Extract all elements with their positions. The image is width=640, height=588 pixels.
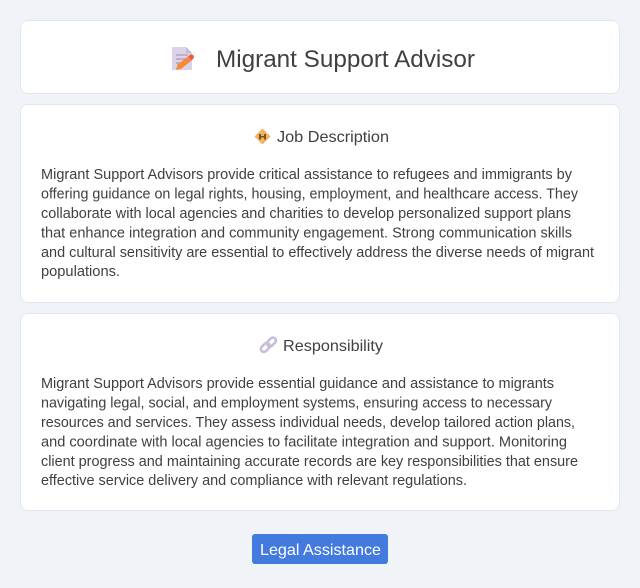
text block: job description <box>41 167 594 280</box>
text block: job description: Migrant Support Advisors provide critical assistance to refugees and immigrants by <box>41 167 573 183</box>
button: legal assistance <box>252 534 388 564</box>
panel: title card <box>20 20 620 94</box>
text block: job description: collaborate with local agencies and charities to develop personalized support plans <box>41 206 571 222</box>
panel: job description <box>20 104 620 303</box>
text block: responsibility: Migrant Support Advisors provide essential guidance and assistance to migrants <box>41 376 554 392</box>
icon: chain link <box>260 336 278 354</box>
panel: responsibility <box>20 313 620 511</box>
text block: responsibility: and coordinate with local agencies to facilitate integration and support. Monitoring <box>41 434 567 450</box>
title: Migrant Support Advisor <box>216 46 475 73</box>
button: legal assistance: Legal Assistance <box>260 542 381 559</box>
icon: diamond road sign <box>254 128 270 144</box>
text block: responsibility: resources and services. They assess individual needs, develop tailored action plans, <box>41 415 575 431</box>
text block: job description: populations. <box>41 264 120 280</box>
text block: responsibility: client progress and maintaining accurate records are key responsibilities that ensure <box>41 454 578 470</box>
text block: job description: and cultural sensitivity are essential to effectively address the diverse needs of migrant <box>41 245 594 261</box>
text block: responsibility: effective service delivery and compliance with relevant regulations. <box>41 473 467 489</box>
heading: job description: Job Description <box>277 129 389 146</box>
heading: responsibility: Responsibility <box>283 338 383 355</box>
text block: responsibility: navigating legal, social, and employment systems, ensuring access to necessary <box>41 396 553 412</box>
icon: document with pencil <box>172 47 194 70</box>
text block: responsibility <box>41 376 578 489</box>
text block: job description: offering guidance on legal rights, housing, employment, and healthcare access. They <box>41 186 579 202</box>
text block: job description: that enhance integration and community engagement. Strong communication skills <box>41 226 572 242</box>
